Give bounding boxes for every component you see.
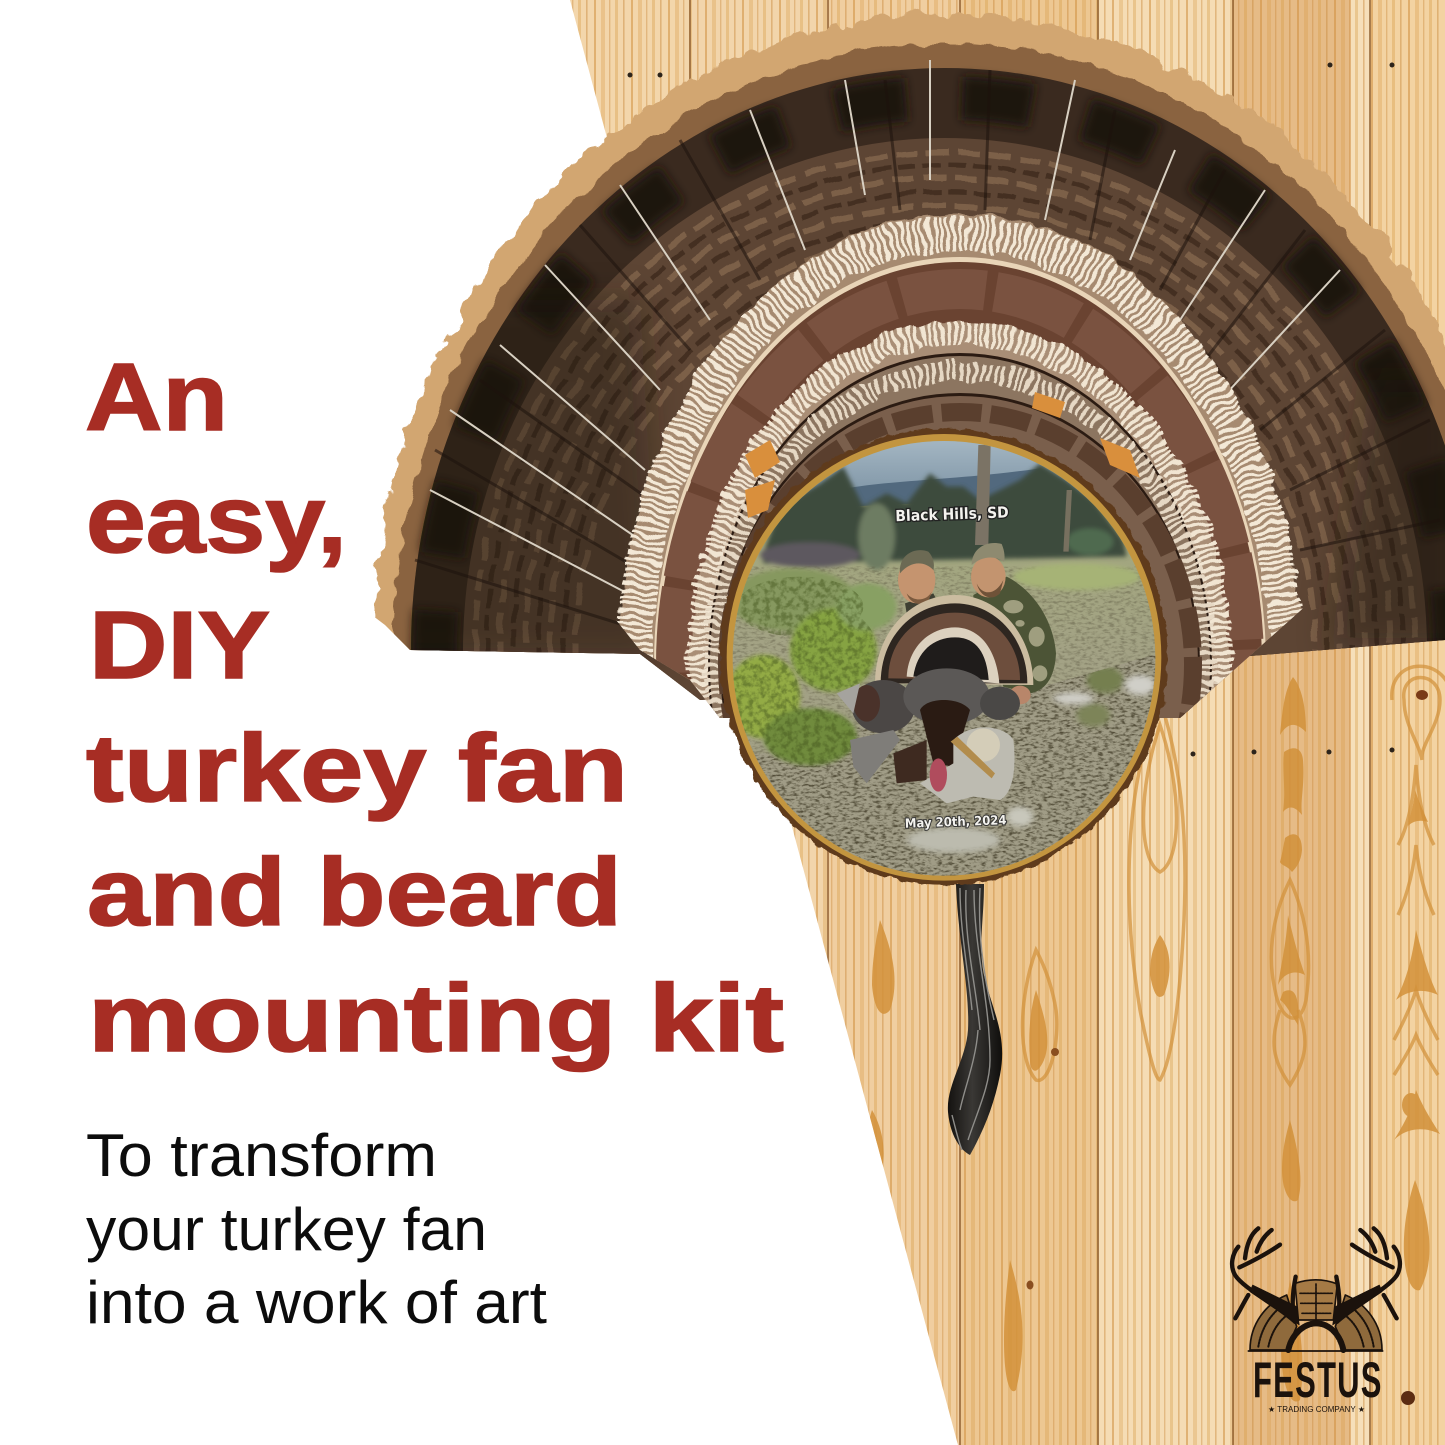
wood slice plaque with photo	[720, 429, 1168, 887]
grain flames	[867, 677, 1440, 1402]
grass	[732, 566, 1156, 754]
subheading: into a work of art	[86, 1269, 547, 1336]
treeline	[760, 463, 1127, 570]
date caption: May 20th, 2024	[905, 812, 1007, 831]
amber glints	[745, 392, 1140, 518]
photo turkey	[837, 595, 1033, 803]
feather shafts	[430, 60, 1340, 600]
hunter: left	[898, 550, 936, 612]
subheading: To transform	[86, 1122, 437, 1189]
bushes	[727, 563, 1140, 767]
wood rim	[720, 429, 1168, 885]
subheading	[86, 1122, 547, 1336]
saddle feather rings	[616, 212, 1303, 718]
icon: antlers and turkey fan	[1232, 1228, 1400, 1351]
wood plank background	[560, 0, 1445, 1445]
subheading: your turkey fan	[86, 1196, 487, 1263]
turkey fan	[372, 8, 1445, 718]
headline: An	[85, 344, 228, 451]
headline: easy,	[86, 466, 347, 573]
headline: and beard	[87, 839, 622, 946]
hunter: right	[971, 543, 1056, 704]
wordmark: FESTUS	[1253, 1351, 1383, 1408]
location caption: Black Hills, SD	[895, 503, 1009, 525]
outer tail feathers	[372, 8, 1445, 700]
headline: mounting kit	[88, 965, 784, 1072]
headline	[85, 344, 784, 1072]
headline: turkey fan	[86, 715, 628, 822]
logo: Festus Trading Company	[1232, 1228, 1400, 1414]
tagline: ★ TRADING COMPANY ★	[1268, 1405, 1365, 1414]
photo	[720, 433, 1168, 887]
headline: DIY	[89, 592, 270, 699]
turkey beard	[948, 884, 1002, 1155]
